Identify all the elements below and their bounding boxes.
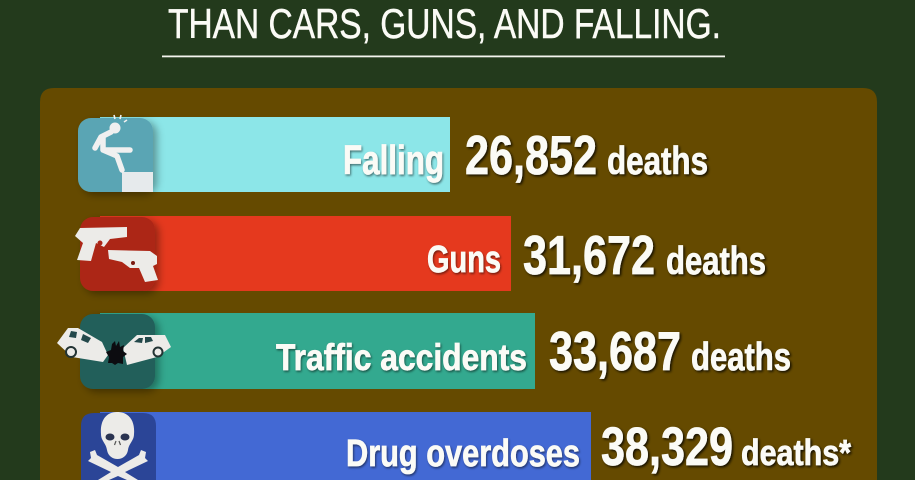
value: falling deaths: deaths	[607, 140, 708, 183]
icon: two handguns	[75, 217, 158, 291]
value: traffic deaths: 33,687	[549, 320, 681, 382]
value: drug overdose deaths	[601, 417, 851, 477]
value: falling deaths: 26,852	[465, 124, 597, 186]
bar: falling	[78, 115, 450, 192]
label: Falling: Falling	[343, 137, 444, 183]
bar: guns	[75, 216, 511, 291]
panel: death counts	[40, 88, 877, 480]
bar: traffic accidents	[57, 313, 535, 389]
label: Traffic accidents: Traffic accidents	[276, 337, 527, 378]
title: THAN CARS, GUNS, AND FALLING.	[168, 0, 721, 47]
value: traffic deaths	[549, 320, 791, 382]
label: Guns: Guns	[427, 239, 501, 281]
icon: skull and crossbones	[81, 412, 156, 480]
value: guns deaths: 31,672	[523, 224, 655, 286]
icon: person falling off step	[78, 115, 153, 192]
value: guns deaths	[523, 224, 766, 286]
value: guns deaths: deaths	[666, 240, 766, 283]
value: traffic deaths: deaths	[691, 336, 791, 379]
value: drug overdose deaths: 38,329	[601, 417, 733, 477]
value: drug overdose deaths: deaths*	[741, 432, 851, 473]
value: falling deaths	[465, 124, 708, 186]
label: Drug overdoses: Drug overdoses	[346, 433, 580, 475]
icon: car crash	[57, 314, 171, 389]
bar: drug overdoses	[81, 412, 591, 480]
